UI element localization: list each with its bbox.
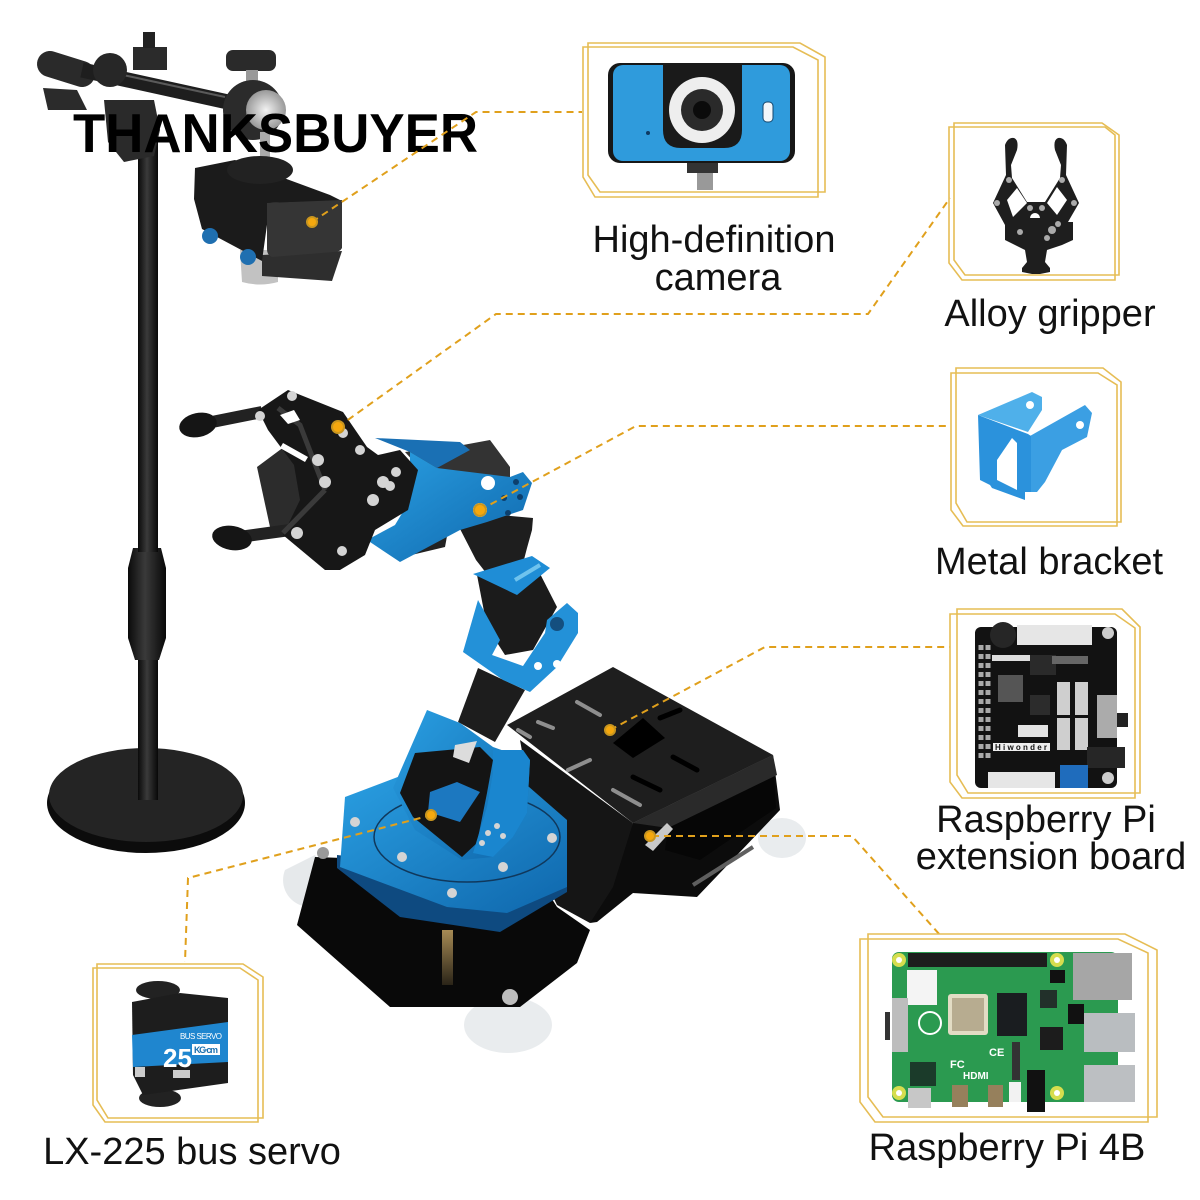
- watermark: THANKSBUYER: THANKSBUYER: [73, 102, 478, 164]
- robotic arm: [177, 390, 806, 1053]
- label: High-definition camera: High-definition: [593, 219, 835, 261]
- leader line: Raspberry Pi 4B: [652, 836, 940, 935]
- elbow joint: [458, 515, 533, 578]
- marker dots: [307, 217, 655, 841]
- icon: Raspberry Pi board: HDMI: [963, 1071, 989, 1082]
- icon: gripper: [993, 138, 1079, 274]
- leader line: gripper: [338, 198, 950, 427]
- icon: Raspberry Pi board: CE: [989, 1047, 1004, 1059]
- icon: extension board: Hiwonder: [995, 743, 1047, 752]
- label: Alloy gripper: Alloy gripper: [944, 293, 1156, 335]
- leader line: extension board: [610, 647, 950, 730]
- leader line: servo: [185, 815, 432, 962]
- rear platform: [590, 755, 780, 923]
- camera stand: [43, 32, 286, 853]
- icon: Raspberry Pi board: [885, 952, 1135, 1112]
- label: Raspberry Pi 4B: Raspberry Pi 4B: [869, 1127, 1145, 1169]
- icon: servo: 25: [163, 1043, 192, 1073]
- octagonal blue base: [337, 855, 567, 932]
- upper servo joint: [405, 440, 510, 490]
- icon: servo: BUS SERVO: [180, 1032, 222, 1041]
- base plate: [297, 857, 590, 1007]
- panel: alloy gripper: [949, 123, 1119, 280]
- label: Metal bracket: Metal bracket: [935, 541, 1163, 583]
- base servo bracket: [393, 710, 530, 860]
- panel: LX-225 bus servo: [93, 964, 263, 1122]
- label: Raspberry Pi extension board: Raspberry Pi: [936, 799, 1156, 841]
- label: High-definition camera: camera: [655, 257, 782, 299]
- brass standoffs: [442, 930, 453, 985]
- gripper fingers: [197, 412, 290, 538]
- lower cylinder: [458, 668, 525, 742]
- icon: Raspberry Pi board: FC: [950, 1059, 965, 1071]
- label: LX-225 bus servo: LX-225 bus servo: [43, 1131, 341, 1173]
- camera on stand: [194, 132, 342, 284]
- lower arm bracket: [477, 560, 557, 655]
- icon: bracket: [978, 392, 1092, 500]
- suction cups: [283, 855, 335, 907]
- icon: webcam: [608, 63, 795, 190]
- panel: Raspberry Pi extension board: [950, 609, 1140, 798]
- base bolt: [502, 989, 518, 1005]
- gripper back plate: [257, 435, 335, 555]
- gripper body: [258, 390, 418, 570]
- icon: extension board: [975, 622, 1128, 788]
- panel: Raspberry Pi 4B: [860, 934, 1157, 1122]
- leader line: camera: [312, 112, 582, 222]
- icon: servo: KG·cm: [194, 1045, 218, 1055]
- icon: servo: [132, 981, 228, 1107]
- leader line: bracket: [480, 426, 950, 510]
- platform slots: [518, 702, 697, 805]
- panel: high-definition camera: [583, 43, 825, 197]
- panel: metal bracket: [951, 368, 1121, 526]
- label: Raspberry Pi extension board: extension board: [916, 836, 1186, 878]
